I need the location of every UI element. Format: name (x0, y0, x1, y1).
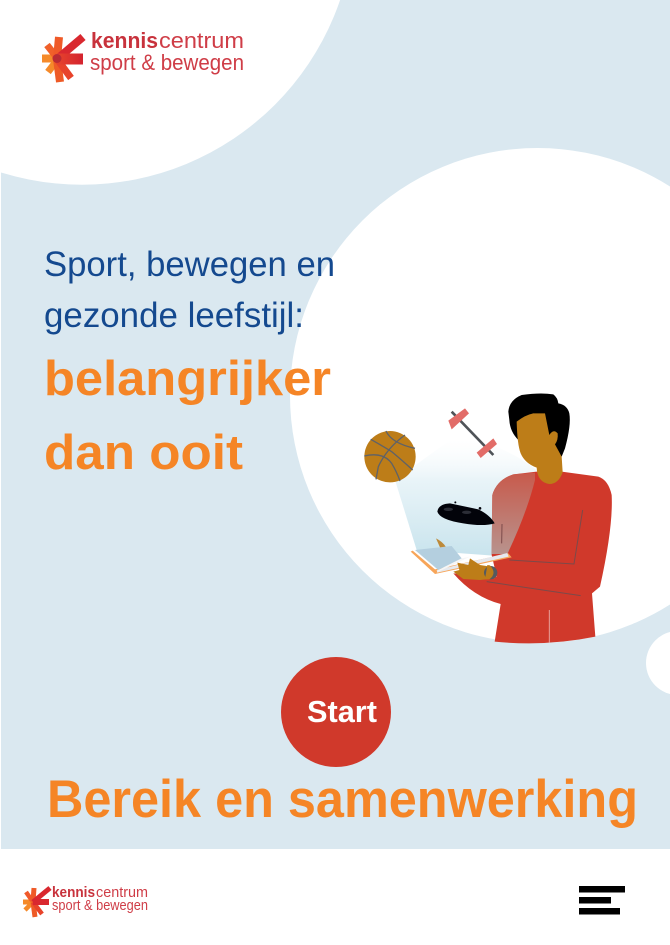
icon: menu (579, 886, 625, 914)
footer wordmark (52, 884, 148, 914)
title: belangrijker dan ooit: belangrijker (44, 352, 331, 406)
logo: footer (23, 884, 148, 917)
logo: kenniscentrum sport & bewegen header (42, 28, 244, 82)
illustration: person with book, sport items (364, 393, 612, 643)
heading: Bereik en samenwerking: Bereik en samenwerking (47, 770, 638, 829)
heading: intro line: gezonde leefstijl: (44, 296, 304, 335)
icon: black shoe (437, 501, 495, 525)
person: head and hair (508, 393, 570, 484)
footer wordmark: kennis (52, 884, 95, 901)
icon: basketball (364, 431, 416, 482)
person: clothing lines (487, 510, 583, 643)
heading: intro line: Sport, bewegen en (44, 245, 335, 284)
footer wordmark: sport & bewegen (52, 897, 148, 914)
person: body (453, 472, 612, 643)
icon: barbell (448, 408, 497, 458)
button: Start (281, 657, 391, 767)
logo wordmark: centrum (159, 28, 244, 53)
person: hand and cuff (453, 558, 497, 580)
title: belangrijker dan ooit (44, 352, 331, 480)
logo wordmark (90, 28, 244, 75)
beam over arm (492, 473, 535, 554)
light beam from book (395, 440, 537, 557)
logo wordmark: sport & bewegen (90, 50, 244, 75)
footer wordmark: centrum (96, 884, 148, 901)
icon: logo star (42, 37, 83, 82)
icon: footer logo star (23, 888, 50, 917)
icon: open book (411, 538, 512, 574)
title: belangrijker dan ooit: dan ooit (44, 426, 243, 480)
logo wordmark: kennis (91, 28, 158, 53)
heading: intro line (44, 245, 335, 335)
button: Start: Start (307, 694, 377, 729)
